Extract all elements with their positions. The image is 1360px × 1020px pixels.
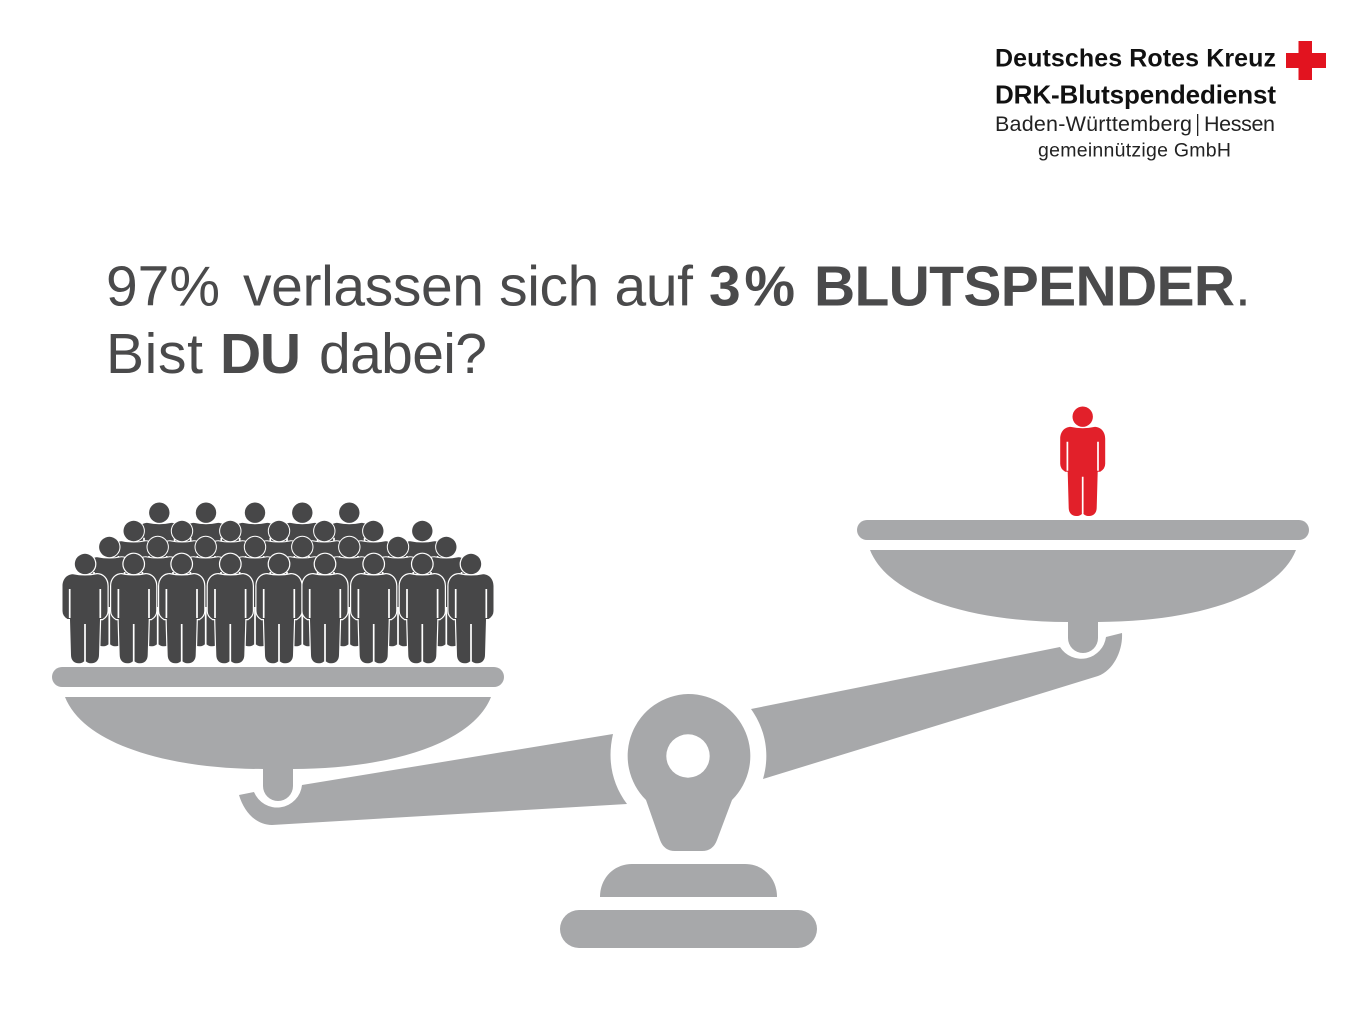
title line 1, percentage: 97% xyxy=(106,254,220,318)
icon: red person, the 3% donor xyxy=(1060,406,1105,516)
crowd front row xyxy=(62,554,494,663)
title line 1, regular part: verlassen sich auf xyxy=(243,254,693,318)
title line 1, full stop: . xyxy=(1235,254,1251,318)
title line 1, bold percentage: 3% xyxy=(709,254,795,318)
title line 2, question end: dabei? xyxy=(319,322,487,386)
title line 2, question start: Bist xyxy=(106,322,203,386)
crowd of 97% xyxy=(62,502,494,663)
right pan plate xyxy=(857,520,1309,540)
crowd second row xyxy=(87,537,469,646)
logo text: service name: DRK-Blutspendedienst xyxy=(995,80,1276,110)
base lower step xyxy=(560,910,817,948)
left beam arm xyxy=(239,734,627,825)
left pan plate xyxy=(52,667,504,687)
logo text: legal form: gemeinnützige GmbH xyxy=(1038,140,1231,162)
base upper step xyxy=(600,864,777,897)
left pan bowl and stem xyxy=(65,697,491,801)
logo text: region, second part: Hessen xyxy=(1204,112,1275,136)
logo: Deutsches Rotes Kreuz xyxy=(995,41,1326,162)
logo text: region, first part: Baden-Württemberg xyxy=(995,112,1192,136)
logo text: organisation name: Deutsches Rotes Kreuz xyxy=(995,44,1276,72)
title xyxy=(106,254,1251,386)
pivot with hole xyxy=(628,694,750,851)
right beam arm xyxy=(751,633,1122,779)
crowd third row xyxy=(111,521,445,630)
scale xyxy=(52,520,1309,948)
right pan bowl and stem xyxy=(870,550,1296,653)
icon: red cross xyxy=(1286,41,1326,80)
crowd back row xyxy=(137,502,372,612)
title line 2, bold DU: DU xyxy=(220,322,301,386)
logo text: separator bar xyxy=(1197,114,1198,136)
title line 1, bold word: BLUTSPENDER xyxy=(814,254,1235,318)
